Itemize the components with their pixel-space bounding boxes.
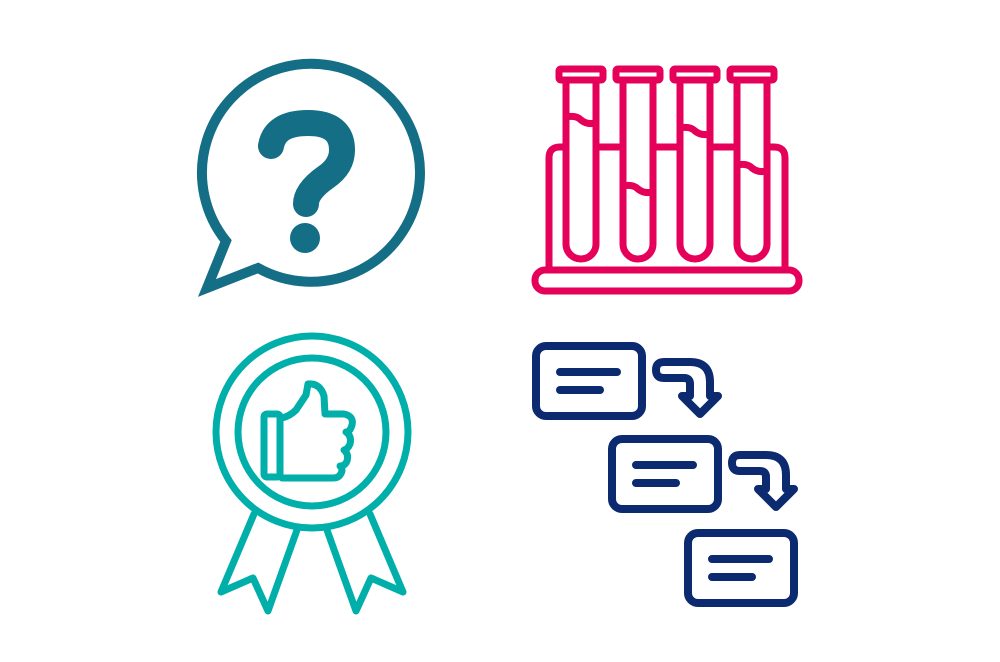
icon: process flow boxes (536, 346, 794, 603)
icon: question speech bubble (202, 64, 420, 288)
box 1 (536, 346, 642, 416)
icon: award medal with thumbs up (216, 336, 408, 611)
arrow 1 (656, 362, 718, 414)
question mark (271, 123, 342, 253)
box 3 (688, 533, 794, 603)
icon: test tubes rack (535, 69, 799, 291)
thumbs up (264, 414, 280, 477)
arrow 2 (732, 455, 794, 507)
box 2 (612, 439, 718, 509)
